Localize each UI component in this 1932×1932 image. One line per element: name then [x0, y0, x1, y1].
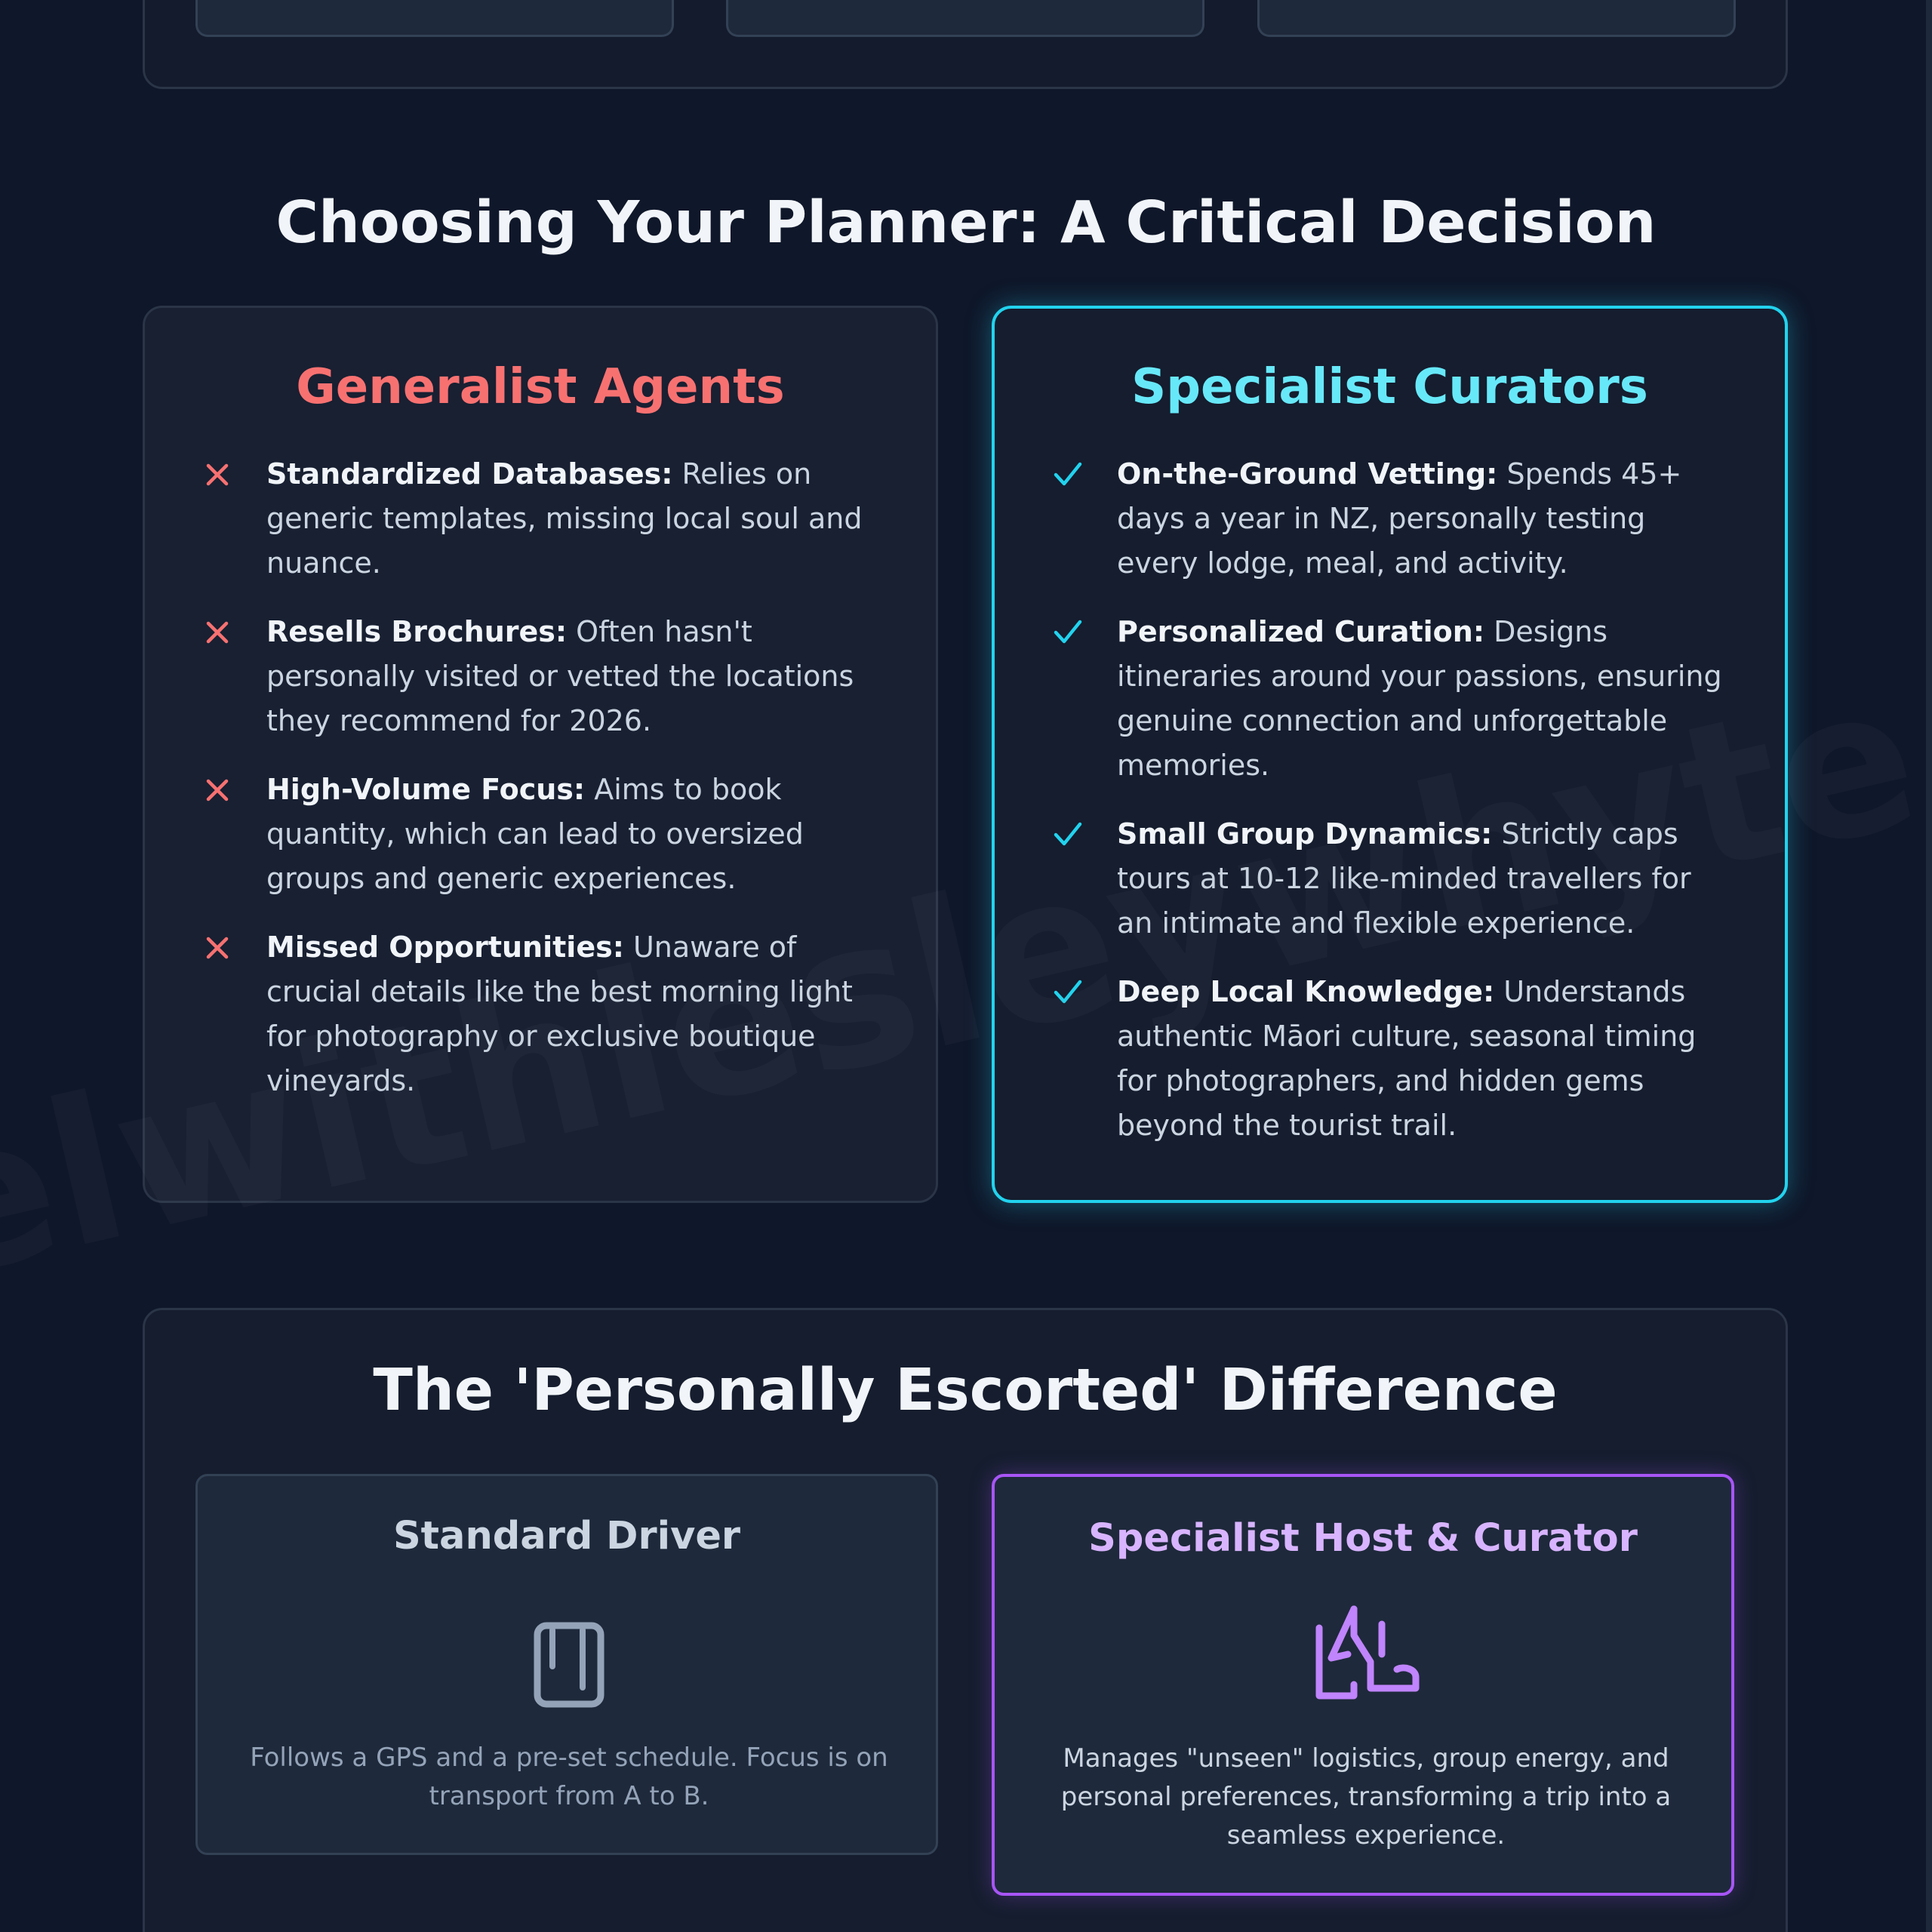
list: specialist benefits — [1054, 457, 1722, 1142]
list: generalist drawbacks: Missed Opportunities: Unaware of crucial details like the best morning light for photography or exclusive boutique vineyards. — [266, 931, 853, 1097]
right edge line — [1926, 0, 1932, 1932]
heading: specialist: Specialist Curators — [1131, 359, 1648, 415]
heading: standard driver: Standard Driver — [393, 1514, 740, 1558]
icon: driver — [534, 1623, 604, 1707]
list: generalist drawbacks: Resells Brochures: Often hasn't personally visited or vetted the locations they recommend for 2026. — [266, 615, 854, 737]
card 2 — [726, 0, 1204, 37]
panel: previous section — [143, 0, 1788, 89]
title: personally escorted: The 'Personally Escorted' Difference — [373, 1357, 1558, 1424]
card: standard driver — [195, 1474, 938, 1855]
card 3 — [1257, 0, 1736, 37]
panel: personally escorted difference — [143, 1308, 1788, 1932]
list: generalist drawbacks: Standardized Databases: Relies on generic templates, missing local soul and nuance. — [266, 457, 863, 580]
panel: generalist agents — [143, 306, 938, 1203]
text: driver description: Follows a GPS and a pre-set schedule. Focus is on transport from A to B. — [250, 1743, 888, 1811]
card 1 — [195, 0, 674, 37]
list: specialist benefits: On-the-Ground Vetting: Spends 45+ days a year in NZ, personally testing every lodge, meal, and activity. — [1117, 457, 1681, 580]
list: specialist benefits: Deep Local Knowledge: Understands authentic Māori culture, seasonal timing for photographers, and hidden gems beyond the tourist trail. — [1117, 975, 1696, 1142]
text: host description: Manages "unseen" logistics, group energy, and personal preferences, transforming a trip into a seamless experience. — [1061, 1743, 1671, 1850]
icon: host — [1316, 1606, 1419, 1700]
list: specialist benefits: Small Group Dynamics: Strictly caps tours at 10-12 like-minded travellers for an intimate and flexible experience. — [1117, 817, 1691, 940]
title: choosing your planner: Choosing Your Planner: A Critical Decision — [276, 189, 1656, 257]
card: specialist host — [992, 1474, 1734, 1896]
list: generalist drawbacks — [207, 457, 863, 1097]
list: specialist benefits: Personalized Curation: Designs itineraries around your passions, ensuring genuine connection and unforgettable memories. — [1117, 615, 1722, 782]
heading: generalist: Generalist Agents — [296, 359, 785, 415]
list: generalist drawbacks: High-Volume Focus: Aims to book quantity, which can lead to oversized groups and generic experiences. — [266, 773, 804, 895]
panel: specialist curators — [992, 306, 1788, 1203]
heading: specialist host: Specialist Host & Curator — [1088, 1516, 1638, 1561]
